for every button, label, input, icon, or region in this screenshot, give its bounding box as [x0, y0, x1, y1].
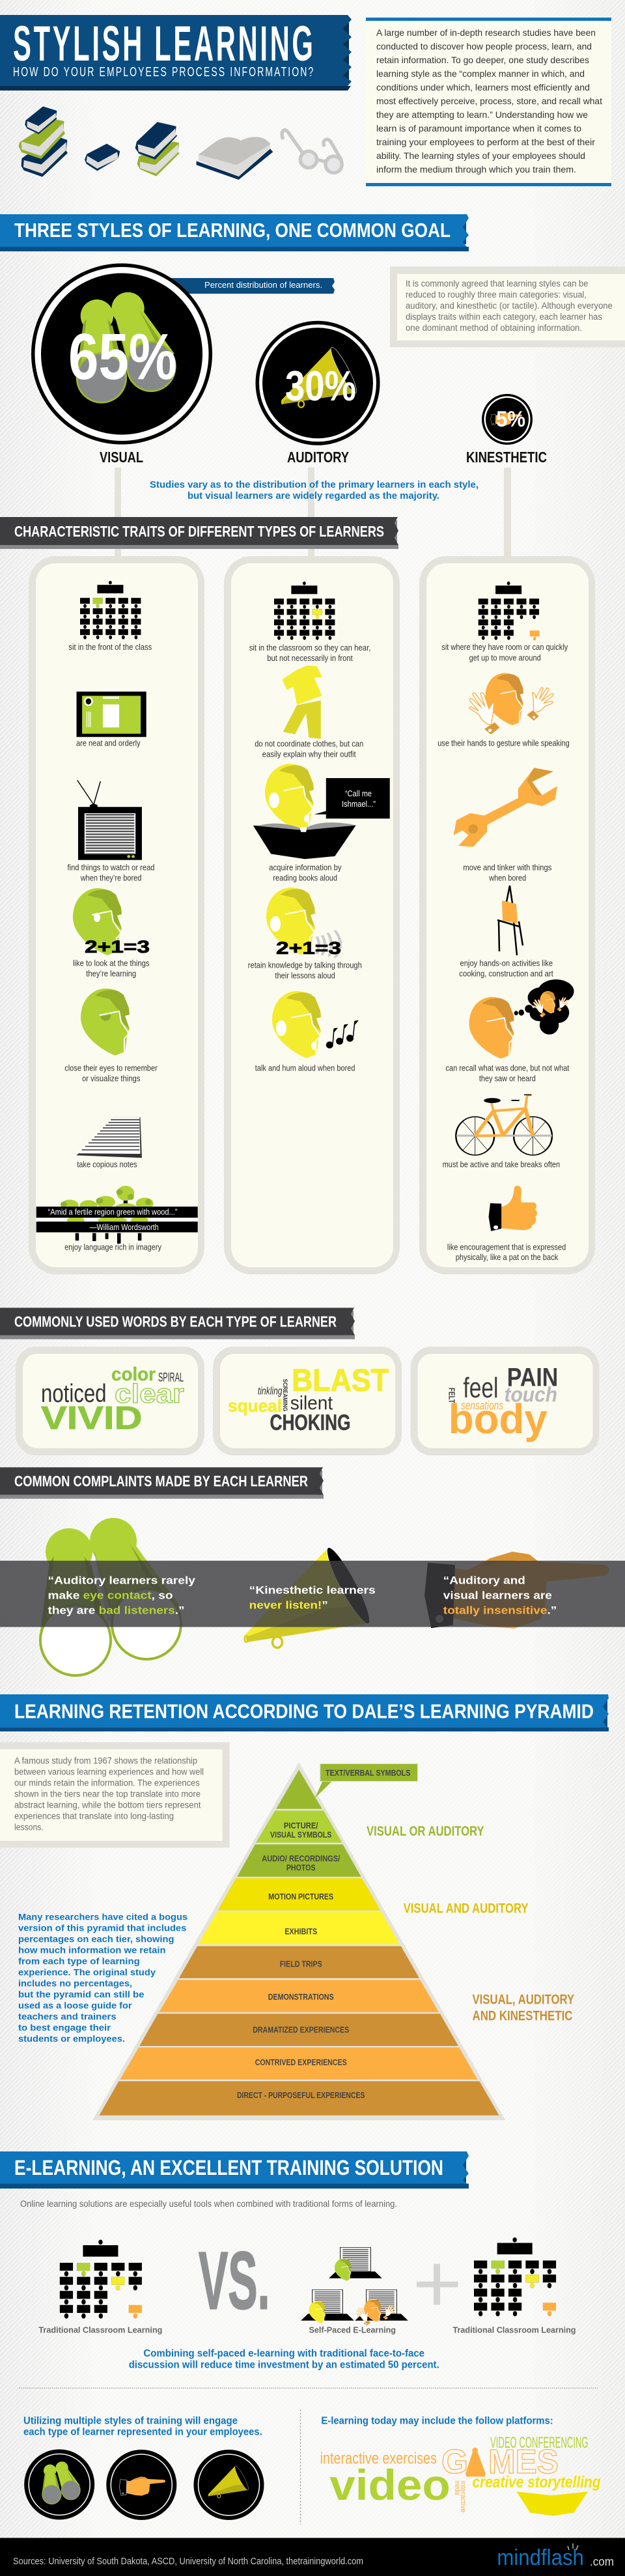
word cloud: platforms: creative storytelling — [473, 2473, 600, 2491]
trait text — [445, 1064, 570, 1084]
panel: kinesthetic words: PAIN — [507, 1364, 558, 1392]
panel: auditory words: SCREAMING — [281, 1379, 288, 1412]
text: distribution note — [150, 479, 479, 501]
icon: head humming music — [272, 991, 359, 1058]
label: self-paced: Self-Paced E-Learning — [309, 2325, 396, 2334]
panel: auditory words: tinkling — [258, 1385, 283, 1397]
trait text — [255, 739, 363, 759]
icon: trees with quote: —William Wordsworth — [90, 1223, 159, 1232]
panel: auditory words: BLAST — [292, 1364, 389, 1398]
panel: introduction: inform the medium through which you train them. — [376, 164, 576, 175]
trait text: do not coordinate clothes, but can — [255, 739, 363, 748]
heading: common complaints — [0, 1467, 324, 1499]
chart: visual 65% circle: 65% — [68, 320, 177, 393]
panel: visual words — [16, 1347, 204, 1455]
panel: introduction: A large number of in-depth research studies have been — [376, 27, 596, 38]
panel: introduction: retain information. To go deeper, one study describes — [376, 55, 589, 65]
icon: notes — [77, 1117, 142, 1158]
panel: kinesthetic words: touch — [504, 1382, 557, 1406]
trait text: sit in the front of the class — [68, 643, 152, 652]
trait text: they saw or heard — [479, 1074, 536, 1084]
quote: kinesthetic: “Auditory and — [443, 1575, 525, 1586]
panel: learning style categories: auditory, and kinesthetic (or tactile). Although everyone — [406, 301, 613, 311]
trait text: close their eyes to remember — [64, 1064, 158, 1073]
text: online learning intro: Online learning solutions are especially useful tools when combined with traditional forms of learning. — [20, 2198, 397, 2209]
word cloud: platforms: interactive exercises — [320, 2449, 437, 2467]
panel: famous study: abstract learning, while the bottom tiers represent — [14, 1800, 201, 1810]
trait text: can recall what was done, but not what — [445, 1064, 570, 1073]
tag: percent distribution — [171, 278, 335, 294]
heading: three styles — [0, 214, 469, 251]
icon: traditional classroom — [474, 2237, 556, 2316]
trait text: enjoy language rich in imagery — [64, 1242, 162, 1252]
icon: self-paced laptops — [301, 2247, 408, 2326]
trait text: cooking, construction and art — [459, 969, 553, 978]
quote: kinesthetic: visual learners are — [443, 1589, 552, 1601]
panel: introduction: ability. The learning styles of your employees should — [376, 150, 585, 161]
trait text: move and tinker with things — [463, 863, 551, 872]
heading: learning retention — [0, 1694, 609, 1731]
heading: characteristic traits: CHARACTERISTIC TRAITS OF DIFFERENT TYPES OF LEARNERS — [14, 523, 384, 540]
heading: e-learning — [0, 2151, 469, 2189]
text: bogus pyramid note: but the pyramid can still be — [18, 1989, 145, 2000]
text: bogus pyramid note: used as a loose guide for — [18, 2000, 132, 2011]
labels: pyramid groups: AND KINESTHETIC — [473, 2009, 573, 2024]
icon: head talking with sum — [266, 888, 341, 958]
panel: learning style categories: reduced to roughly three main categories: visual, — [406, 290, 587, 300]
text: bogus pyramid note: version of this pyramid that includes — [18, 1923, 187, 1933]
trait text — [248, 961, 362, 981]
text: combining note — [129, 2348, 439, 2370]
icon: head reading book aloud: Ishmael...” — [342, 800, 376, 809]
word cloud: platforms: MES — [488, 2443, 559, 2481]
labels: pyramid groups: VISUAL, AUDITORY — [473, 1992, 574, 2007]
heading: common complaints: COMMON COMPLAINTS MADE BY EACH LEARNER — [14, 1472, 308, 1489]
plus sign — [417, 2264, 458, 2305]
trait text: get up to move around — [469, 653, 541, 662]
icon: green head with sum — [73, 888, 150, 957]
text: utilizing styles — [23, 2416, 262, 2438]
panel: kinesthetic words: sensations — [461, 1399, 503, 1412]
panel: auditory words: squeal — [228, 1396, 282, 1416]
trait text: they’re learning — [86, 969, 136, 978]
trait text: must be active and take breaks often — [443, 1160, 560, 1169]
trait text — [447, 1242, 566, 1262]
panel: introduction: conditions under which, learners most efficiently and — [376, 82, 590, 92]
panel: auditory words: silent — [290, 1393, 333, 1414]
vs mark: VS. — [199, 2236, 270, 2327]
quote: visual: make eye contact , so — [48, 1589, 173, 1601]
title banner — [0, 15, 352, 91]
icon: pointing hand — [425, 1552, 609, 1629]
trait text: talk and hum aloud when bored — [255, 1064, 355, 1073]
panel: kinesthetic words: feel — [463, 1372, 498, 1404]
footer — [0, 2538, 625, 2576]
panel: introduction: conducted to discover how people process, learn, and — [376, 41, 592, 51]
panel: auditory words: CHOKING — [270, 1410, 350, 1435]
trait text: easily explain why their outfit — [262, 750, 356, 759]
icon: megaphone circle — [194, 2450, 264, 2520]
panel: kinesthetic words — [411, 1347, 600, 1455]
heading: characteristic traits — [0, 517, 398, 549]
word cloud: platforms: interactive — [459, 2481, 467, 2513]
quote: auditory — [249, 1584, 376, 1612]
subtitle: HOW DO YOUR EMPLOYEES PROCESS INFORMATION? — [13, 64, 313, 79]
panel: introduction: training your employees to perform at the best of their — [376, 137, 595, 147]
chart: learning pyramid — [92, 1762, 505, 2120]
panel: visual words: SPIRAL — [158, 1371, 184, 1385]
icon: classroom seat chart — [80, 581, 141, 639]
text: bogus pyramid note: experience. The original study — [18, 1967, 156, 1978]
labels: pyramid groups: VISUAL AND AUDITORY — [404, 1901, 529, 1916]
trait text: or visualize things — [82, 1074, 140, 1084]
heading: commonly used words — [0, 1308, 355, 1339]
trait text: their lessons aloud — [275, 972, 335, 981]
icon: clothes — [282, 665, 322, 739]
panel: introduction: they are attempting to learn.” Understanding how we — [376, 109, 588, 120]
tier labels: MOTION PICTURES — [268, 1892, 333, 1901]
panel: learning style categories: It is commonly agreed that learning styles can be — [406, 279, 588, 288]
icon: trees with quote — [36, 1186, 198, 1244]
quote: kinesthetic: totally insensitive .” — [443, 1604, 557, 1616]
quote: visual: they are bad listeners .” — [48, 1604, 185, 1616]
trait text — [269, 863, 342, 882]
tier labels — [237, 1768, 411, 2100]
tier labels: FIELD TRIPS — [280, 1959, 322, 1968]
panel: introduction — [366, 18, 611, 186]
panel: visual words: VIVID — [41, 1399, 142, 1436]
panel: visual traits — [29, 556, 204, 1274]
panel: introduction: most effectively perceive, process, store, and recall what — [376, 96, 602, 106]
panel: famous study: A famous study from 1967 shows the relationship — [14, 1756, 197, 1766]
connector lines — [115, 468, 511, 559]
icon: green head with sum: 2+1=3 — [85, 937, 150, 957]
icon: traditional classroom — [60, 2239, 142, 2319]
quote: auditory: “Kinesthetic learners — [249, 1584, 376, 1597]
icon: head talking with sum: 2+1=3 — [276, 938, 341, 958]
text: bogus pyramid note: Many researchers have cited a bogus — [18, 1912, 188, 1922]
text: bogus pyramid note: how much information we retain — [18, 1945, 166, 1955]
tier labels: CONTRIVED EXPERIENCES — [255, 2058, 347, 2067]
text: distribution note: but visual learners are widely regarded as the majority. — [188, 490, 439, 501]
panel: learning style categories: one dominant method of obtaining information. — [406, 323, 582, 333]
tier labels: TEXT/VERBAL SYMBOLS — [326, 1768, 411, 1778]
icon: television — [77, 780, 142, 860]
text: utilizing styles: each type of learner represented in your employees. — [23, 2427, 262, 2438]
panel: visual words: color — [111, 1364, 156, 1385]
icon: megaphone — [244, 1544, 376, 1647]
icon: books and glasses — [19, 106, 342, 180]
icon: trees with quote: “Amid a fertile region green with wood...” — [48, 1207, 177, 1216]
trait text — [441, 643, 568, 662]
chart: visual 65% circle — [31, 263, 212, 444]
text: bogus pyramid note: percentages on each tier, showing — [18, 1934, 174, 1944]
heading: three styles: THREE STYLES OF LEARNING, ONE COMMON GOAL — [14, 219, 451, 242]
labels: learner types — [100, 449, 547, 466]
text: distribution note: Studies vary as to the distribution of the primary learners in each style, — [150, 479, 479, 490]
trait text: reading books aloud — [273, 873, 337, 882]
trait text: sit in the classroom so they can hear, — [249, 643, 370, 652]
trait text: sit where they have room or can quickly — [441, 643, 568, 652]
trait text: use their hands to gesture while speaking — [438, 738, 570, 748]
panel: auditory words — [213, 1347, 402, 1455]
panel: kinesthetic words: FELT — [447, 1388, 457, 1403]
word cloud: platforms: video — [329, 2461, 451, 2509]
panel: learning style categories: displays traits within each category, each learner has — [406, 312, 602, 322]
heading: e-learning: E-LEARNING, AN EXCELLENT TRAINING SOLUTION — [14, 2156, 443, 2179]
trait text: retain knowledge by talking through — [248, 961, 362, 970]
tier labels: DIRECT - PURPOSEFUL EXPERIENCES — [237, 2090, 365, 2100]
sources: Sources: University of South Dakota, ASCD, University of North Carolina, thetrainingworld.com — [13, 2556, 363, 2567]
panel: visual words: noticed — [41, 1380, 107, 1408]
icon: head reading book aloud: “Call me — [345, 789, 372, 798]
text: combining note: Combining self-paced e-learning with traditional face-to-face — [143, 2348, 424, 2359]
icon: binoculars circle — [24, 2450, 94, 2520]
trait text: take copious notes — [77, 1160, 137, 1169]
label: traditional classroom: Traditional Classroom Learning — [38, 2325, 162, 2334]
panel: famous study: lessons. — [14, 1822, 44, 1832]
trait text — [64, 1064, 158, 1084]
panel: introduction: learning style as the “complex manner in which, and — [376, 68, 585, 79]
text: utilizing styles: Utilizing multiple styles of training will engage — [23, 2416, 238, 2427]
text: bogus pyramid note: students or employees. — [18, 2034, 125, 2044]
label: traditional classroom: Traditional Classroom Learning — [453, 2325, 576, 2334]
panel: kinesthetic words: body — [449, 1395, 548, 1442]
trait text: acquire information by — [269, 863, 342, 872]
word cloud: platforms — [320, 2434, 600, 2516]
trait text — [249, 643, 370, 663]
text: combining note: discussion will reduce time investment by an estimated 50 percent. — [129, 2359, 439, 2370]
labels: pyramid groups — [367, 1824, 574, 2024]
chart: kinesthetic 5% circle: 5% — [496, 407, 525, 432]
icon: wrench — [454, 768, 557, 847]
panel: famous study: between various learning experiences and how well — [14, 1767, 204, 1777]
panel: famous study: experiences that translate into long-lasting — [14, 1812, 174, 1821]
tier labels: AUDIO/ RECORDINGS/ — [262, 1853, 340, 1863]
chart: kinesthetic 5% circle — [482, 394, 533, 445]
word cloud: platforms: G — [441, 2443, 468, 2481]
quote: auditory: never listen! ” — [249, 1599, 328, 1612]
labels: learner types: VISUAL — [100, 449, 143, 466]
trait text: when they’re bored — [80, 873, 141, 882]
panel: famous study — [0, 1743, 230, 1848]
icon: hand circle — [106, 2450, 176, 2520]
icon: bicycle — [456, 1095, 552, 1155]
trait text: when bored — [488, 873, 526, 882]
panel: kinesthetic traits — [419, 556, 595, 1274]
trait text: but not necessarily in front — [267, 654, 353, 663]
quote: visual: “Auditory learners rarely — [48, 1575, 196, 1586]
panel: auditory traits — [224, 556, 400, 1274]
trait text: physically, like a pat on the back — [456, 1253, 559, 1262]
heading: commonly used words: COMMONLY USED WORDS BY EACH TYPE OF LEARNER — [14, 1313, 337, 1330]
panel: introduction: learn is of paramount importance when it comes to — [376, 123, 581, 133]
trait text — [459, 959, 553, 978]
icon: green head eyes closed — [81, 988, 130, 1056]
labels: learner types: AUDITORY — [287, 449, 349, 466]
icon: easel — [497, 886, 523, 955]
text: bogus pyramid note: includes no percentages, — [18, 1978, 132, 1989]
icon: classroom seat chart — [479, 581, 540, 641]
tier labels: DEMONSTRATIONS — [268, 1992, 334, 2002]
tier labels: EXHIBITS — [285, 1926, 317, 1936]
labels: learner types: KINESTHETIC — [466, 449, 547, 466]
labels: pyramid groups: VISUAL OR AUDITORY — [367, 1824, 484, 1839]
trait text — [463, 863, 551, 882]
icon: head with thought cloud — [469, 979, 574, 1059]
logo: mindflash — [497, 2545, 584, 2570]
quote: kinesthetic — [443, 1575, 557, 1616]
icon: head with gesturing hands — [469, 673, 553, 735]
trait text — [68, 863, 155, 882]
icon: head reading book aloud — [253, 764, 390, 859]
tier labels: PICTURE/ — [284, 1821, 318, 1830]
tier labels: PHOTOS — [286, 1862, 316, 1873]
panel: famous study: shown in the tiers near the top translate into more — [14, 1789, 201, 1799]
trait text: are neat and orderly — [76, 739, 141, 748]
icon: binoculars — [39, 1518, 181, 1675]
text: bogus pyramid note: teachers and trainers — [18, 2011, 117, 2022]
trait text: enjoy hands-on activities like — [460, 959, 553, 968]
icon: notebook — [77, 692, 146, 737]
logo: .com — [590, 2555, 614, 2568]
trait text: like encouragement that is expressed — [447, 1242, 566, 1252]
panel: famous study: our minds retain the information. The experiences — [14, 1778, 200, 1788]
trait text: like to look at the things — [73, 959, 150, 968]
icon: thumbs up — [489, 1186, 537, 1231]
tag: percent distribution: Percent distribution of learners. — [204, 281, 322, 290]
icon: classroom seat chart — [274, 581, 335, 640]
word cloud: platforms: media — [453, 2481, 461, 2495]
band: complaints — [0, 1561, 625, 1627]
title: STYLISH LEARNING — [13, 16, 313, 71]
text: platforms heading: E-learning today may include the follow platforms: — [321, 2416, 553, 2427]
chart: auditory 30% circle — [255, 321, 380, 445]
panel: visual words: clear — [115, 1379, 184, 1408]
trait text: find things to watch or read — [68, 863, 155, 872]
text: bogus pyramid note: from each type of learning — [18, 1956, 140, 1967]
tier labels: VISUAL SYMBOLS — [270, 1830, 332, 1840]
trait text — [73, 959, 150, 978]
quote: visual — [48, 1575, 196, 1616]
panel: learning style categories — [390, 266, 625, 347]
chart: auditory 30% circle: 30% — [285, 362, 356, 410]
text: bogus pyramid note — [18, 1912, 188, 2044]
text: bogus pyramid note: to best engage their — [18, 2023, 111, 2033]
tier labels: DRAMATIZED EXPERIENCES — [253, 2024, 349, 2034]
